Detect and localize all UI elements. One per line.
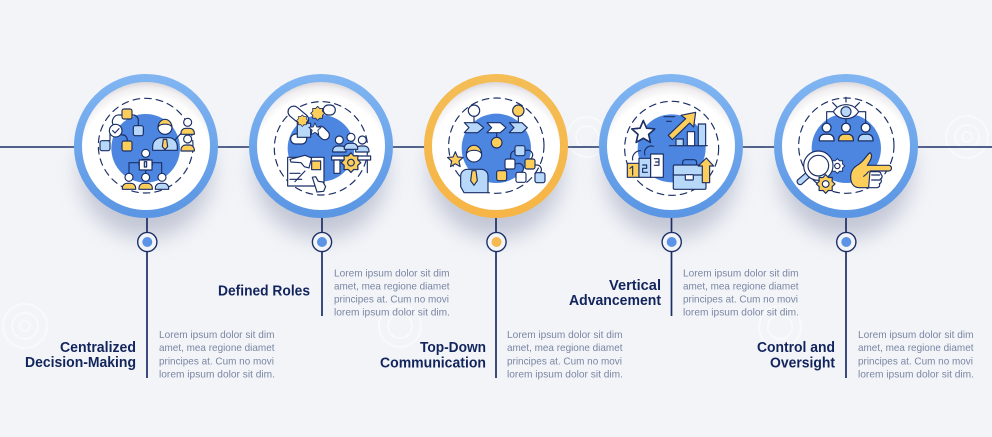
body text 3: amet, mea regione diamet	[507, 342, 623, 354]
body text 3: principes at. Cum no movi	[507, 356, 622, 368]
circle shadow 2	[255, 106, 387, 238]
body text 2: amet, mea regione diamet	[334, 280, 450, 292]
connector line 4	[670, 216, 672, 316]
heading 3: Top-Down	[420, 340, 486, 356]
circle shadow 3	[430, 106, 562, 238]
node 5	[837, 232, 856, 252]
node 2	[312, 232, 332, 252]
body text 1: lorem ipsum dolor sit dim.	[159, 368, 275, 380]
body text 2: lorem ipsum dolor sit dim.	[334, 306, 450, 318]
node 3	[487, 232, 506, 252]
heading 1: Centralized	[60, 340, 136, 356]
icon: organization chart and manager	[98, 98, 194, 193]
body text 3: lorem ipsum dolor sit dim.	[507, 368, 623, 380]
circle shadow 4	[605, 106, 737, 238]
body text 2: principes at. Cum no movi	[334, 294, 449, 306]
step 3: Top-Down Communication	[380, 78, 623, 380]
body text 1: amet, mea regione diamet	[159, 342, 275, 354]
icon: hierarchy and leader	[448, 98, 545, 193]
ring 5	[778, 78, 914, 214]
ring 2	[253, 78, 389, 214]
icon: eye, team, magnifier and pointing hand	[797, 97, 894, 193]
body text 5: amet, mea regione diamet	[858, 342, 974, 354]
heading 2: Defined Roles	[218, 284, 310, 300]
ring 3	[428, 78, 564, 214]
body text 5: principes at. Cum no movi	[858, 356, 973, 368]
connector line 3	[495, 216, 497, 378]
heading 1: Decision-Making	[25, 355, 136, 371]
watermark swirls	[3, 116, 988, 348]
circle shadow 1	[80, 106, 212, 238]
body text 2: Lorem ipsum dolor sit dim	[334, 268, 450, 280]
step 2: Defined Roles	[218, 78, 450, 318]
body text 4: principes at. Cum no movi	[683, 294, 798, 306]
step 5: Control and Oversight	[757, 78, 974, 380]
timeline horizontal line	[0, 146, 992, 148]
body text 1: principes at. Cum no movi	[159, 356, 274, 368]
body text 4: Lorem ipsum dolor sit dim	[683, 268, 799, 280]
connector line 5	[845, 216, 847, 378]
node 1	[138, 232, 157, 252]
heading 3: Communication	[380, 356, 486, 372]
body text 1: Lorem ipsum dolor sit dim	[159, 329, 275, 341]
connector line 2	[321, 216, 323, 316]
body text 4: lorem ipsum dolor sit dim.	[683, 306, 799, 318]
body text 5: lorem ipsum dolor sit dim.	[858, 368, 974, 380]
node 4	[662, 232, 681, 252]
ring 1	[78, 78, 214, 214]
step 1: Centralized Decision-Making	[25, 78, 275, 380]
icon: podium, growth chart and briefcase	[625, 101, 719, 195]
ring 4	[603, 78, 739, 214]
heading 5: Oversight	[770, 356, 835, 372]
body text 3: Lorem ipsum dolor sit dim	[507, 329, 623, 341]
icon: puzzle, paperwork and team	[274, 102, 371, 195]
body text 5: Lorem ipsum dolor sit dim	[858, 329, 974, 341]
heading 5: Control and	[757, 340, 835, 356]
step 4: Vertical Advancement	[569, 78, 799, 318]
heading 4: Advancement	[569, 293, 661, 309]
body text 4: amet, mea regione diamet	[683, 280, 799, 292]
heading 4: Vertical	[609, 278, 661, 294]
connector line 1	[146, 216, 148, 378]
circle shadow 5	[780, 106, 912, 238]
